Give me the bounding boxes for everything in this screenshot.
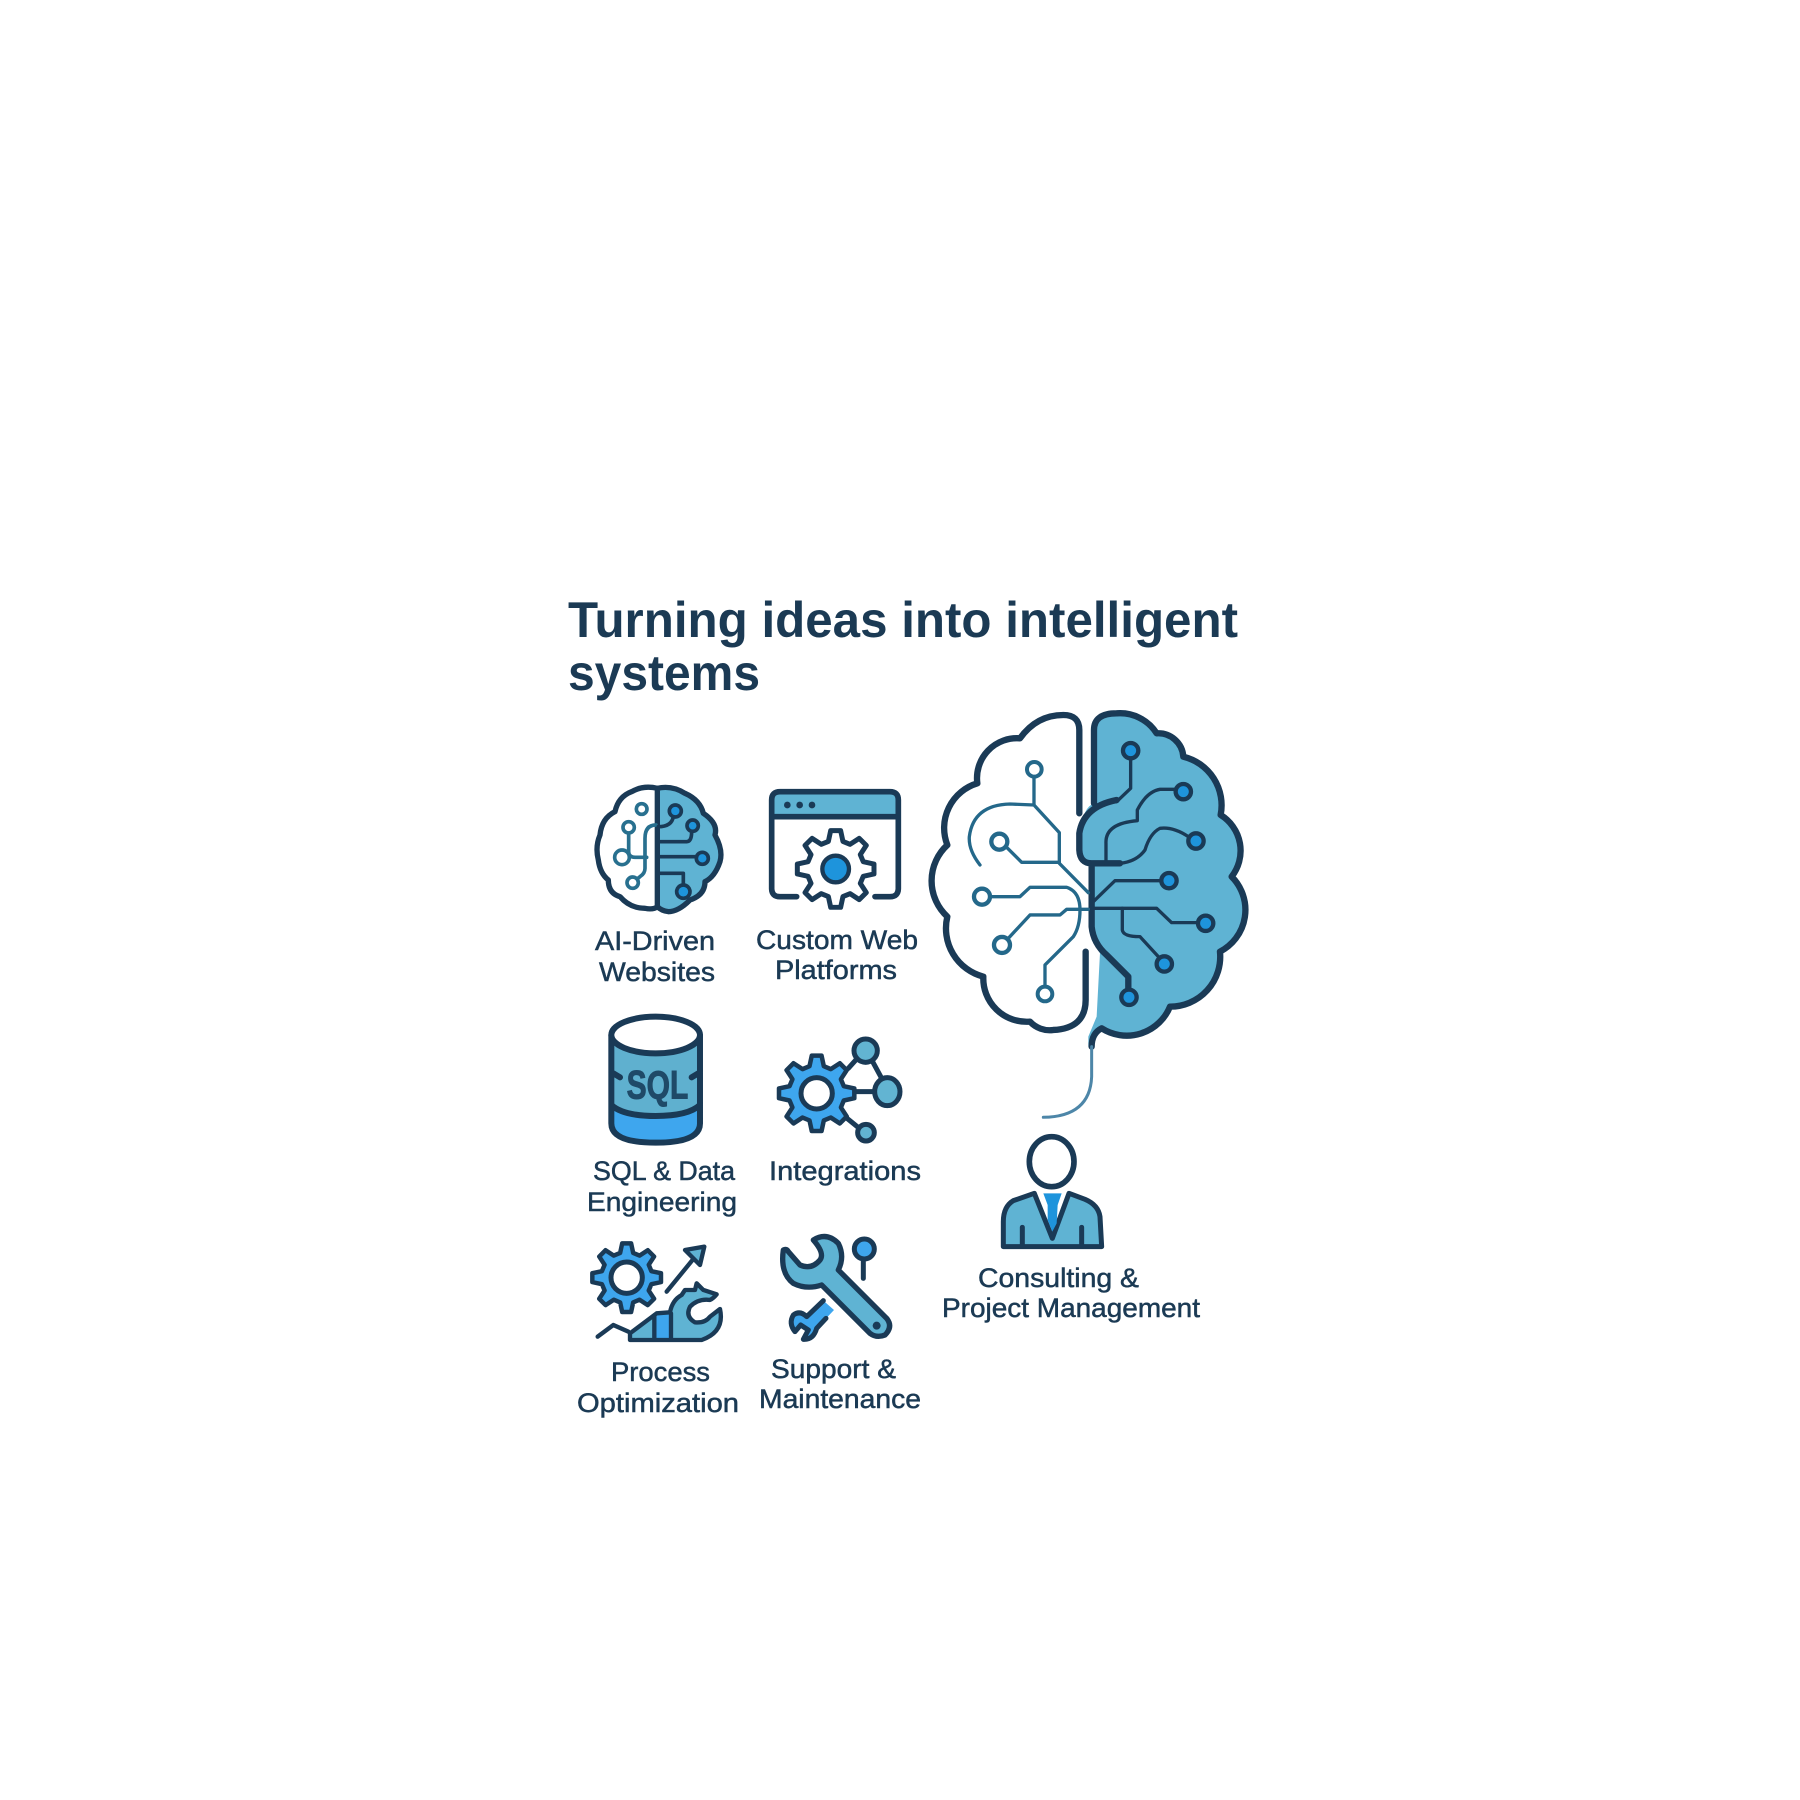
- label: Process Optimization: [577, 1357, 739, 1418]
- title: Turning ideas into intelligent: [568, 592, 1238, 648]
- label: Custom Web Platforms: [756, 925, 918, 985]
- title: [568, 592, 1238, 701]
- label: Consulting & Project Management: [942, 1263, 1201, 1323]
- icon: wrenches and pin: [783, 1237, 890, 1339]
- title: systems: [568, 645, 760, 701]
- label: Support & Maintenance: Support &: [771, 1354, 896, 1384]
- panel: Process Optimization: [577, 1243, 739, 1418]
- right hemisphere fill: [1079, 713, 1245, 1047]
- icon: business person: [1003, 1137, 1102, 1247]
- panel: AI-Driven Websites: [595, 787, 721, 987]
- label: SQL & Data Engineering: [587, 1156, 737, 1217]
- panel: SQL & Data Engineering: [587, 1017, 737, 1217]
- right circuit nodes: [1121, 743, 1213, 1005]
- icon: small circuit brain: [597, 787, 721, 912]
- left circuit traces: [969, 762, 1088, 1001]
- label: SQL & Data Engineering: Engineering: [587, 1187, 737, 1217]
- label: Consulting & Project Management: Project Management: [942, 1293, 1201, 1323]
- label: Process Optimization: Optimization: [577, 1388, 739, 1418]
- label: Custom Web Platforms: Custom Web: [756, 925, 918, 955]
- label: Consulting & Project Management: Consulting &: [978, 1263, 1139, 1293]
- label: AI-Driven Websites: [595, 926, 715, 987]
- icon: gear, growth arrow and wrench: [592, 1243, 721, 1340]
- icon: SQL database cylinder: [611, 1017, 700, 1143]
- panel: Consulting & Project Management: [942, 1137, 1201, 1323]
- label: Support & Maintenance: Maintenance: [759, 1384, 921, 1414]
- icon: gear with connected nodes: [779, 1039, 900, 1141]
- label: Process Optimization: Process: [611, 1357, 710, 1387]
- panel: Support & Maintenance: [759, 1237, 921, 1414]
- panel: Custom Web Platforms: [756, 792, 918, 985]
- icon: SQL database cylinder: SQL: [627, 1063, 688, 1107]
- label: Support & Maintenance: [759, 1354, 921, 1414]
- label: SQL & Data Engineering: SQL & Data: [593, 1156, 736, 1186]
- icon: browser window with gear: [772, 792, 898, 907]
- illustration: large circuit brain: [932, 713, 1245, 1117]
- label: Custom Web Platforms: Platforms: [775, 955, 897, 985]
- right circuit traces: [1092, 758, 1197, 957]
- panel: Integrations: [769, 1039, 921, 1186]
- left hemisphere outline: [932, 715, 1086, 1030]
- label: AI-Driven Websites: Websites: [599, 957, 715, 987]
- brain stem line: [1043, 1047, 1092, 1117]
- label: Integrations: Integrations: [769, 1156, 921, 1186]
- label: AI-Driven Websites: AI-Driven: [595, 926, 715, 956]
- right hemisphere outline: [1079, 713, 1245, 1047]
